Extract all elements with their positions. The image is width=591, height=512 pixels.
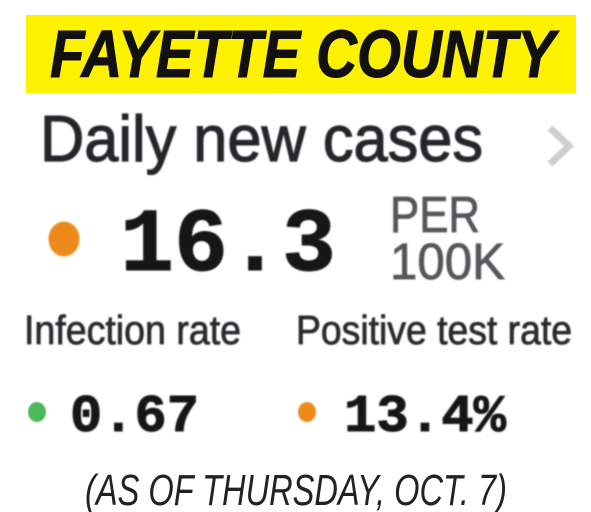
value: positive test rate: 13.4% [344, 387, 506, 447]
unit: per 100k: 100K [390, 233, 505, 290]
panel: daily new cases [40, 102, 569, 298]
label: infection rate: Infection rate [24, 307, 241, 353]
panel: infection rate [24, 307, 241, 447]
icon: orange status dot [298, 402, 316, 422]
value: daily new cases: 16.3 [120, 196, 336, 298]
icon: orange status dot [48, 222, 80, 256]
unit: per 100k: PER [390, 186, 480, 243]
heading: daily new cases: Daily new cases [40, 102, 483, 175]
icon: chevron [550, 128, 569, 164]
icon: green status dot [28, 402, 46, 422]
value: infection rate: 0.67 [70, 387, 199, 447]
label: positive test rate: Positive test rate [296, 307, 572, 353]
unit: per 100k [390, 186, 505, 290]
panel: positive test rate [296, 307, 572, 447]
